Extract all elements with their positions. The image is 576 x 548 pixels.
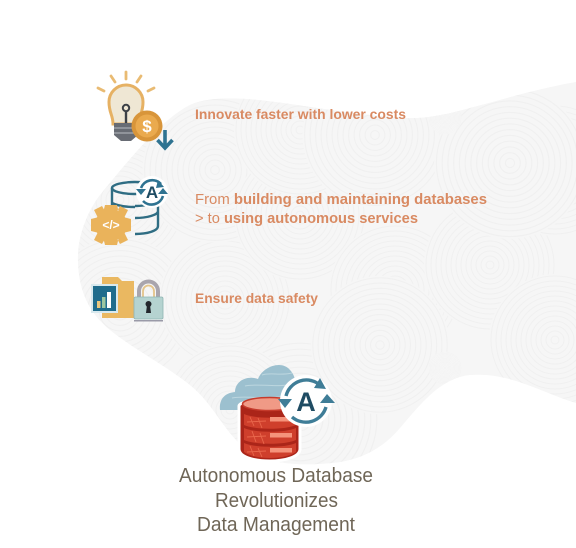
icon: light bulb with falling cost: $	[142, 117, 152, 136]
icon: database with gear and autonomous badge: </>	[102, 218, 120, 232]
title: Data Management	[197, 514, 355, 536]
icon: cloud with red autonomous database	[220, 365, 335, 461]
icon: light bulb with falling cost	[98, 72, 172, 148]
icon: database with gear and autonomous badge	[91, 176, 168, 245]
text: from building to using: From building and maintaining databases	[195, 192, 487, 208]
text: ensure data safety: Ensure data safety	[195, 291, 318, 306]
icon: folder, chart and padlock	[91, 277, 163, 322]
background textured blob	[78, 82, 576, 464]
text: innovate faster: Innovate faster with lower costs	[195, 107, 406, 122]
text: to autonomous services: > to using autonomous services	[195, 211, 418, 227]
infographic canvas	[78, 70, 576, 535]
title: Revolutionizes	[215, 490, 338, 512]
icon: database with gear and autonomous badge: A	[146, 183, 158, 202]
title	[179, 465, 373, 536]
icon: cloud with red autonomous database: A	[296, 387, 316, 417]
title: Autonomous Database	[179, 465, 373, 487]
